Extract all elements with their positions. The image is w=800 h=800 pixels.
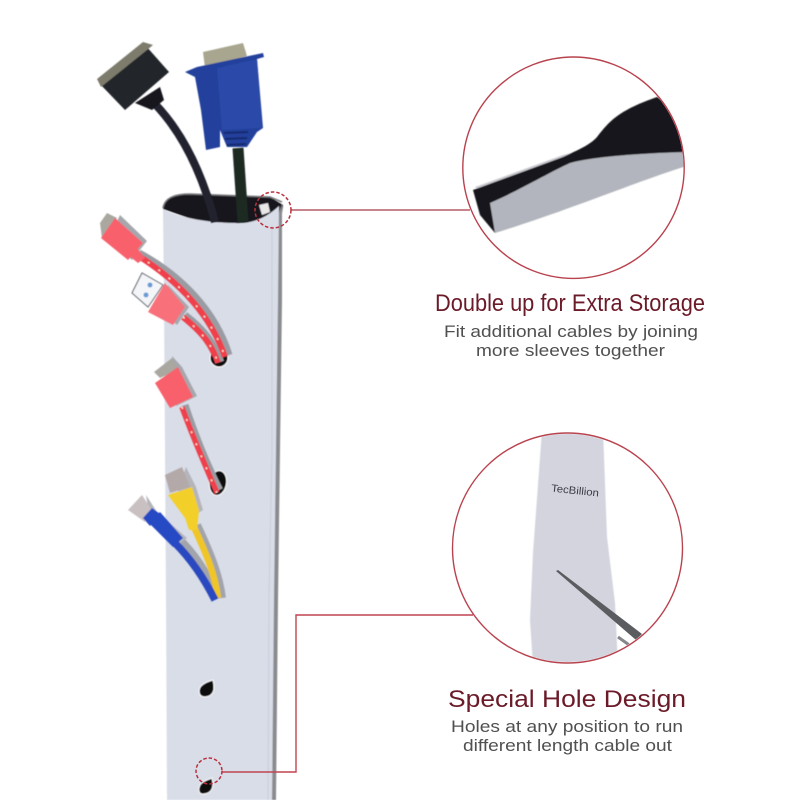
text: double up description: Fit additional cables by joining xyxy=(444,322,698,341)
sleeve body xyxy=(163,206,279,800)
circle outline xyxy=(463,57,684,278)
body shading xyxy=(217,59,262,130)
black cable xyxy=(238,148,243,222)
cable shadow xyxy=(178,525,222,598)
scissors xyxy=(556,570,642,640)
grey outer sleeve xyxy=(490,152,690,233)
white clip at corner xyxy=(259,203,270,215)
cable two xyxy=(183,317,218,363)
holes xyxy=(199,349,229,794)
plug shadows xyxy=(146,467,203,545)
sleeve column xyxy=(530,430,618,665)
grey rim xyxy=(163,194,282,208)
metal plug xyxy=(203,43,247,68)
blue RJ45 plug xyxy=(128,495,153,522)
heading: double up: Double up for Extra Storage xyxy=(435,290,705,317)
black DVI connector and cable xyxy=(97,42,215,222)
yellow boot xyxy=(168,487,199,530)
cable one xyxy=(137,255,225,357)
circle callout: hole detail xyxy=(452,430,682,665)
ethernet cables xyxy=(128,467,222,600)
connector body xyxy=(100,46,169,110)
strain relief xyxy=(135,87,164,110)
dashed marker: bottom xyxy=(196,758,222,784)
silver highlight xyxy=(475,152,575,192)
micro USB plug one xyxy=(100,213,117,238)
stitch line xyxy=(268,225,272,800)
USB-A plug xyxy=(132,273,163,307)
sleeve right edge xyxy=(272,204,282,800)
text: double up description xyxy=(444,322,698,360)
black cable xyxy=(155,104,215,222)
dashed marker: top xyxy=(255,192,291,228)
metal strip xyxy=(97,42,153,87)
blue body xyxy=(185,53,264,150)
micro USB plug two xyxy=(154,358,177,378)
text: double up description: more sleeves together xyxy=(476,341,665,360)
sleeve: main product xyxy=(163,194,283,800)
connector line: top callout xyxy=(291,209,470,211)
heading: special hole design: Special Hole Design xyxy=(448,686,686,713)
blue VGA connector and cable xyxy=(185,43,264,222)
text: hole description: Holes at any position to run xyxy=(451,717,683,736)
black inner opening xyxy=(163,194,283,226)
brand label: TecBillion xyxy=(551,483,600,499)
yellow RJ45 plug xyxy=(165,467,190,493)
cable three xyxy=(182,407,217,493)
red USB cables xyxy=(100,213,229,493)
cable shadows xyxy=(139,253,229,490)
black sleeve lining xyxy=(473,97,690,233)
blue cable xyxy=(175,543,215,600)
text: hole description xyxy=(451,717,683,755)
circle outline xyxy=(452,433,682,663)
yellow cable xyxy=(193,525,218,598)
text: hole description: different length cable out xyxy=(463,736,672,755)
circle callout: double up detail xyxy=(463,57,690,278)
cable ribs xyxy=(224,132,248,145)
blue boot xyxy=(148,512,183,547)
plug shadows xyxy=(108,215,197,406)
infographic canvas xyxy=(96,42,704,800)
connector line: bottom callout xyxy=(222,615,473,772)
